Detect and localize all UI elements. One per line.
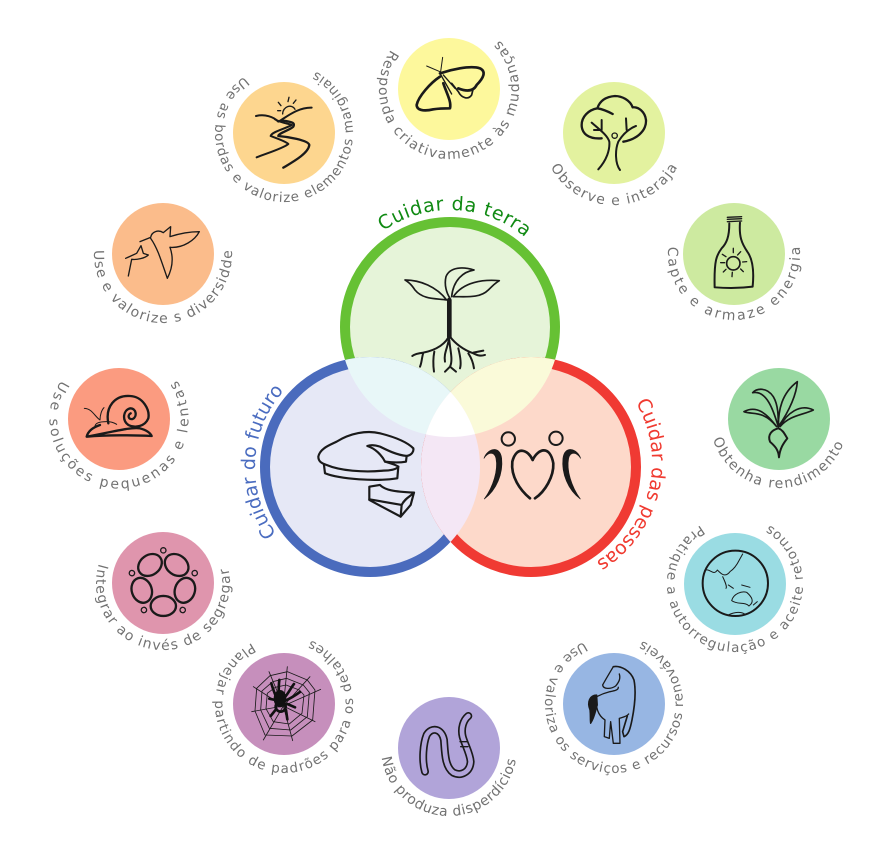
icon: people and heart bbox=[484, 432, 581, 499]
circle: Cuidar da terra bbox=[345, 222, 555, 432]
heading: Cuidar das pessoas: Cuidar das pessoas bbox=[598, 399, 666, 570]
disc bbox=[563, 653, 665, 755]
label: Pratique a autorregulação e aceite retornos bbox=[667, 526, 803, 654]
label: Capte e armaze energia bbox=[667, 248, 802, 320]
disc bbox=[233, 653, 335, 755]
principle: Use soluções pequenas e lentas bbox=[49, 368, 189, 491]
principle: Capte e armaze energia bbox=[667, 203, 802, 320]
principle: Observe e interaja bbox=[552, 82, 677, 206]
overlap: centre bbox=[426, 392, 475, 437]
overlap: futuro and pessoas bbox=[421, 434, 480, 542]
label: Use e valorize s diversidde bbox=[94, 251, 232, 324]
label: Obtenha rendimento bbox=[714, 438, 842, 488]
principle: Planejar partindo de padrões para os detalhes bbox=[212, 641, 354, 775]
principle: Obtenha rendimento bbox=[714, 368, 842, 488]
principle: Integrar ao invés de segregar bbox=[95, 532, 232, 650]
heading: Cuidar do futuro: Cuidar do futuro bbox=[240, 386, 282, 538]
circle: Cuidar das pessoas bbox=[426, 362, 636, 572]
label: Não produza disperdícios bbox=[382, 756, 516, 816]
icon: five cells bbox=[128, 548, 198, 616]
label: Responda criativamente às mudanças bbox=[376, 42, 520, 160]
panel: Venn diagram of three ethics bbox=[260, 222, 641, 577]
principle: Use e valorize a diversidade bbox=[94, 203, 232, 324]
icon: butterfly bbox=[417, 57, 484, 110]
heading: Cuidar da terra: Cuidar da terra bbox=[378, 196, 529, 236]
overlap: terra and futuro bbox=[345, 357, 450, 434]
disc bbox=[233, 82, 335, 184]
label: Use e valoriza os serviços e recursos renováveis bbox=[544, 642, 683, 776]
principle: Responda criativamente às mudanças bbox=[376, 38, 520, 160]
disc bbox=[112, 532, 214, 634]
icon: bottle with sun bbox=[715, 217, 753, 288]
principle: Use e valoriza os serviços e recursos renováveis bbox=[544, 642, 683, 776]
principle: Não produza disperdícios bbox=[382, 697, 516, 816]
icon: winding road and sun bbox=[256, 97, 312, 168]
icon: globe bbox=[703, 551, 768, 616]
icon: spider web bbox=[252, 667, 321, 741]
icon: beet bbox=[744, 382, 813, 457]
label: Use soluções pequenas e lentas bbox=[49, 382, 189, 491]
circle: Cuidar do futuro bbox=[265, 362, 475, 572]
disc bbox=[398, 697, 500, 799]
icon: snail bbox=[84, 396, 152, 437]
overlap: terra and pessoas bbox=[450, 357, 555, 434]
principle: Pratique a autorregulação e aceite retornos bbox=[667, 526, 803, 654]
label: Use as bordas e valorize elementos marginais bbox=[215, 72, 354, 202]
disc bbox=[684, 533, 786, 635]
principle: Use as bordas e valorize elementos marginais bbox=[215, 72, 354, 202]
icon: tree bbox=[582, 96, 646, 170]
icon: worm bbox=[423, 716, 471, 774]
disc bbox=[683, 203, 785, 305]
label: Integrar ao invés de segregar bbox=[95, 564, 232, 650]
disc bbox=[68, 368, 170, 470]
disc bbox=[728, 368, 830, 470]
disc bbox=[398, 38, 500, 140]
icon: horse bbox=[589, 666, 635, 743]
icon: hummingbird and flower bbox=[126, 227, 199, 278]
label: Observe e interaja bbox=[552, 164, 677, 206]
disc bbox=[112, 203, 214, 305]
icon: stones bbox=[318, 432, 414, 517]
label: Planejar partindo de padrões para os detalhes bbox=[212, 641, 354, 775]
disc bbox=[563, 82, 665, 184]
icon: seedling with roots bbox=[405, 268, 499, 372]
